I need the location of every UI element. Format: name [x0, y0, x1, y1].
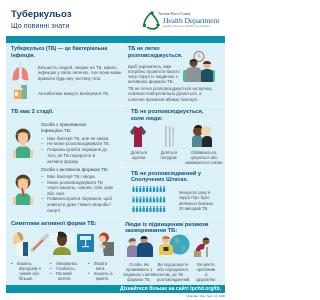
bullets: weight loss: [88, 260, 113, 281]
icon: thermometer: [30, 234, 49, 252]
panel: people at higher risk: [122, 219, 225, 285]
panel: TB does not spread easily: [128, 46, 215, 102]
caption: health problems: Ви маєте: [197, 262, 215, 266]
bullets: активну форму.: [47, 159, 79, 164]
text: outdoors: сонячне проміння вбиває бактерії.: [128, 96, 198, 102]
caption: health problems: здоров'ям.: [196, 277, 216, 282]
text: Pierce County cases: окрузі Пірс було: [179, 195, 210, 200]
icon: two people living together: [126, 236, 153, 257]
icon: person coughing blood: [99, 232, 114, 256]
heading: ТБ не легко: [128, 46, 160, 52]
top teal bar: [6, 36, 225, 43]
bullets: смерті.: [47, 208, 61, 213]
caption: close contact: Особи, які: [129, 262, 149, 266]
caption: kiss and hug: замінюються соком.: [185, 160, 223, 165]
pictogram: 30 people: [132, 186, 166, 212]
text: time needed: [128, 64, 180, 84]
subheading: інфекцією ТБ:: [41, 128, 71, 133]
heading: ТБ не розповсюджений у: [131, 170, 201, 176]
icon: shirt: [130, 126, 146, 147]
text: lungs: [38, 64, 122, 81]
text: Pierce County cases: Минулого року в: [179, 190, 210, 195]
heading: захворювання ТБ:: [125, 228, 177, 234]
link text: Дізнайтеся більше на сайті tpchd.org/tb.: [120, 286, 221, 292]
panel: TB does not spread when: [130, 109, 223, 165]
icon: person with health problems: [191, 236, 212, 257]
heading: Туберкульоз (ТБ) — це бактеріальна: [11, 46, 107, 52]
caption: kiss and hug: Обіймаються,: [191, 150, 217, 154]
heading: Симптоми активної форми ТБ:: [11, 221, 97, 227]
caption: close contact: людиною з активною: [123, 272, 163, 277]
caption: travel: Ви подорожуєте: [158, 262, 188, 266]
bullets: – Має бактерії ТБ, але не хвора.: [41, 136, 110, 140]
caption: health problems: зі: [205, 272, 207, 277]
caption: share dishes: Діляться: [161, 150, 177, 154]
panel: TB is a bacterial infection: [11, 46, 122, 99]
subheading: Особа з прихованою: [41, 122, 86, 127]
heading: розповсюджується.: [128, 53, 182, 59]
bullets: weight loss: ваги.: [96, 266, 105, 271]
caption: share clothes: [130, 150, 147, 160]
subtitle: Що повинні знати: [11, 21, 69, 30]
caption: share clothes: одягом.: [132, 155, 146, 160]
text: outdoors: оскільки повітря вільно рухається, а: [128, 91, 202, 96]
text: time needed: активною формою ТБ.: [128, 79, 174, 84]
text: outdoors: [128, 86, 213, 102]
text: antibiotics: Антибіотики можуть вилікувати ТБ.: [38, 90, 109, 96]
bullets: cough: • Кашель: [11, 260, 32, 266]
caption: travel: розповсюджений.: [157, 277, 190, 282]
bullets: уникнути дуже тяжкої хвороби і: [47, 202, 111, 207]
bullets: weight loss: кров'ю.: [96, 276, 109, 281]
text: active TB: [41, 167, 113, 213]
caption: share dishes: посудом.: [160, 155, 178, 160]
heading: коли люди:: [131, 116, 163, 122]
logo: health department: Tacoma-Pierce County: [158, 12, 191, 16]
caption: health problems: [190, 262, 222, 282]
subheading: [41, 122, 86, 133]
caption: health problems: проблеми: [197, 267, 215, 272]
text: lungs: інфекцію у своїх легенях. Але вона може: [38, 70, 122, 75]
caption: share dishes: [160, 150, 178, 160]
bullets: – Повинна пройти лікування до: [41, 147, 107, 152]
icon: antibiotics: [14, 85, 27, 99]
heading: [131, 170, 201, 183]
bullets: fever: • Лихоманка.: [50, 260, 78, 266]
heading: [11, 46, 108, 59]
bullets: weight loss: • Втрата: [88, 260, 107, 266]
text: lungs: Більшість людей, хворих на ТБ, мають: [38, 64, 117, 70]
text: time needed: Щоб заразитись, вам: [128, 64, 171, 68]
panel: main background: [6, 36, 225, 293]
bullets: fever: • Поганий: [50, 271, 72, 276]
text: outdoors: ТБ не легко розповсюджується на вулиці,: [128, 86, 213, 90]
bullets: – Не може розповсюджувати ТБ.: [41, 141, 110, 146]
bullets: або сміх.: [47, 191, 65, 196]
icon: person with active TB: [13, 174, 33, 205]
heading: [125, 222, 220, 236]
heading: ТБ не розповсюджується,: [131, 109, 203, 115]
heading: [131, 109, 203, 122]
bullets: – Може розповсюджувати ТБ: [41, 180, 103, 185]
caption: close contact: формою ТБ.: [127, 277, 151, 282]
panel: TB not common in the US: [131, 170, 213, 212]
caption: close contact: [123, 262, 155, 282]
icon: scale: [77, 234, 94, 252]
panel: symptoms: [11, 220, 114, 281]
text: Pierce County cases: 30 випадків ТБ.: [179, 206, 208, 211]
bullets: fever: апетит.: [58, 276, 71, 281]
caption: travel: [157, 262, 189, 282]
heading: Сполучених Штатах.: [131, 177, 188, 183]
icon: person sweating: [50, 232, 74, 255]
heading: інфекція.: [11, 53, 35, 59]
bullets: cough: тижнів або: [19, 271, 39, 276]
caption: share clothes: Діляться: [131, 150, 147, 154]
heading: Люди із підвищеним ризиком: [125, 222, 208, 228]
panel: two stages: [11, 109, 113, 213]
bullets: [41, 174, 113, 213]
bullets: fever: • Слабкість.: [50, 266, 76, 271]
bullets: того, як ТБ переросте в: [47, 153, 95, 158]
bullets: – Має бактерії ТБ і хвора.: [41, 174, 96, 179]
bullets: – Повинна пройти лікування, щоб: [41, 196, 112, 201]
caption: travel: або народилися,: [157, 267, 189, 272]
icon: person with latent TB: [13, 128, 33, 158]
bullets: cough: впродовж 3: [19, 266, 41, 271]
icon: two people with clock: [183, 51, 215, 82]
icon: cutlery: [165, 126, 174, 147]
title: Туберкульоз: [11, 9, 71, 20]
text: latent TB: [41, 122, 110, 164]
caption: kiss and hug: цілуються або: [190, 155, 217, 160]
bullets: [41, 136, 110, 164]
footer note: Ukrainian / Rev. Sept. 10, 2020: [186, 294, 225, 298]
caption: travel: там, де ТБ: [163, 272, 183, 277]
logo: health department: Healthy People in Healthy Communities: [163, 25, 210, 28]
bullets: cough: [11, 260, 41, 281]
icon: lungs: [12, 62, 28, 80]
bullets: cough: більше.: [19, 276, 33, 281]
text: time needed: часу поруч із людиною з: [128, 74, 178, 79]
text: lungs: вражати будь-яку частину тіла.: [38, 76, 101, 80]
text: time needed: потрібно провести багато: [128, 69, 180, 74]
logo: health department: Health Department: [163, 16, 219, 25]
icon: coughing person: [13, 232, 28, 256]
logo: health department: [142, 11, 220, 30]
text: Pierce County cases: виявлено близько: [179, 201, 213, 206]
text: Pierce County cases: [179, 190, 213, 211]
bullets: через кашель, чхання, спів, крик: [47, 185, 113, 190]
icon: traveller and globe: [159, 234, 189, 255]
heading: ТБ має 2 стадії.: [11, 109, 54, 115]
caption: close contact: проживають з: [126, 267, 152, 272]
bullets: weight loss: • Кашель із: [88, 271, 113, 276]
caption: kiss and hug: [185, 150, 223, 165]
subheading: Особа з активною формою ТБ:: [41, 167, 109, 172]
bullets: fever: [50, 260, 78, 281]
icon: kissing couple: [192, 125, 212, 147]
heading: [128, 46, 182, 59]
bottom teal bar with link: [6, 285, 225, 293]
